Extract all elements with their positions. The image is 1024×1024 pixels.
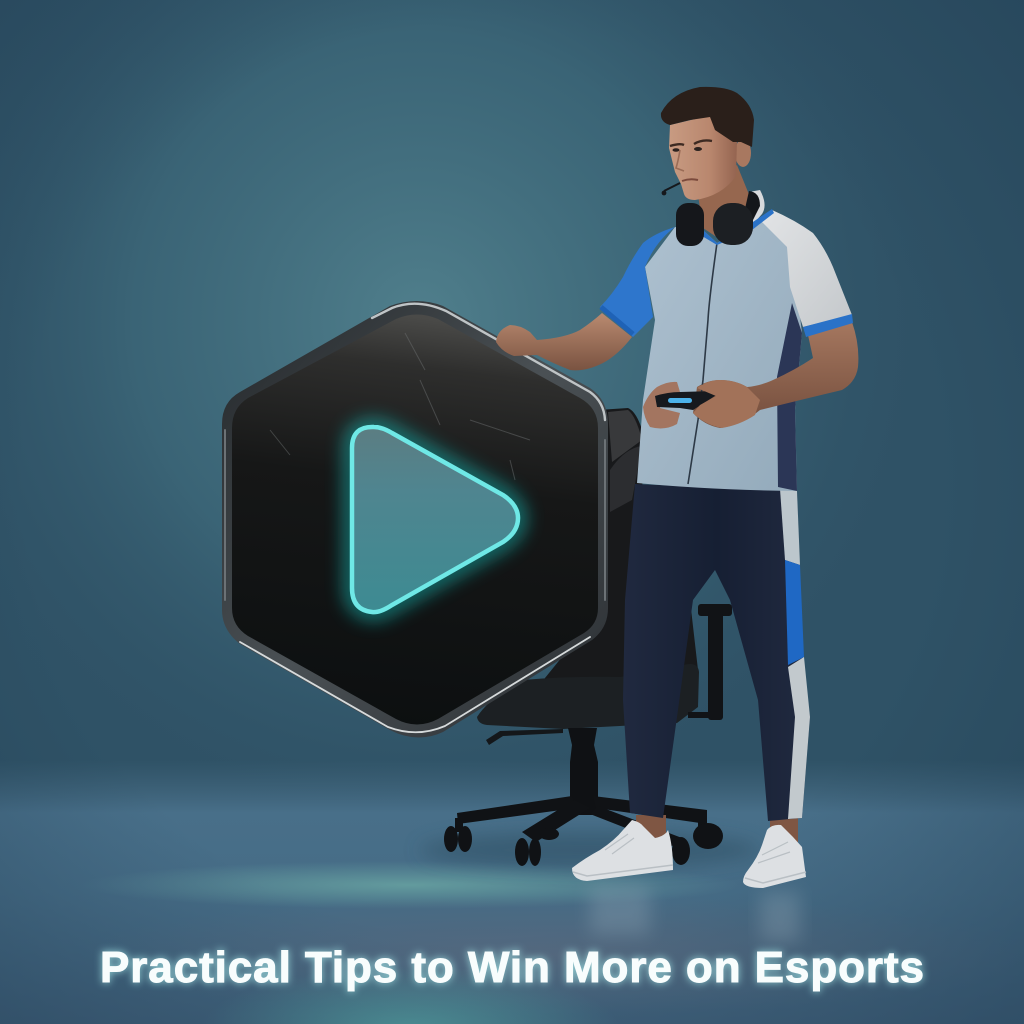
pants — [623, 484, 810, 821]
rim highlights — [225, 304, 605, 732]
shirt body — [637, 212, 802, 491]
shirt side navy panel — [777, 303, 802, 491]
floor shadows and reflections — [420, 832, 800, 942]
left hand — [643, 382, 680, 428]
controller — [655, 391, 718, 410]
gaming chair — [444, 408, 732, 866]
left arm — [496, 313, 632, 370]
chair side bolster — [610, 446, 642, 512]
right hand — [693, 380, 760, 428]
right sleeve — [760, 210, 852, 327]
shoe right — [743, 825, 806, 888]
chair armrest — [688, 604, 732, 720]
play icon glow — [352, 427, 518, 612]
chair back cushion highlight — [608, 410, 642, 462]
headset — [662, 183, 774, 246]
facial features — [670, 140, 712, 181]
pants stripe: grey bottom — [788, 657, 810, 819]
pants stripe: grey top — [780, 489, 800, 565]
shoe soles and laces — [573, 834, 806, 883]
chair seat — [477, 664, 699, 729]
left cuff — [601, 307, 633, 334]
hexagon play panel — [222, 301, 608, 738]
person — [496, 87, 858, 888]
collar blue — [702, 209, 774, 245]
microphone boom — [664, 183, 680, 191]
hair — [661, 87, 754, 147]
shoe left — [572, 820, 673, 881]
ear — [735, 139, 751, 167]
headset band — [748, 190, 765, 230]
right cuff — [803, 314, 853, 337]
neck — [698, 165, 757, 238]
chair back — [520, 408, 698, 720]
zipper — [688, 243, 717, 484]
chair lever — [486, 729, 563, 745]
right arm — [693, 322, 858, 428]
icon: play triangle — [352, 427, 518, 612]
left sleeve — [600, 227, 675, 337]
chair base — [455, 796, 707, 846]
title: Practical Tips to Win More on Esports — [100, 943, 924, 992]
casters — [444, 823, 723, 866]
pants stripe: blue — [785, 560, 804, 665]
hexagon rim — [222, 301, 608, 738]
ankles — [636, 815, 798, 842]
ear cups — [676, 203, 704, 246]
face — [669, 115, 737, 200]
scratches — [270, 333, 530, 480]
hexagon face — [232, 314, 598, 724]
chair stem — [568, 728, 598, 815]
title glow: Practical Tips to Win More on Esports — [100, 943, 924, 992]
